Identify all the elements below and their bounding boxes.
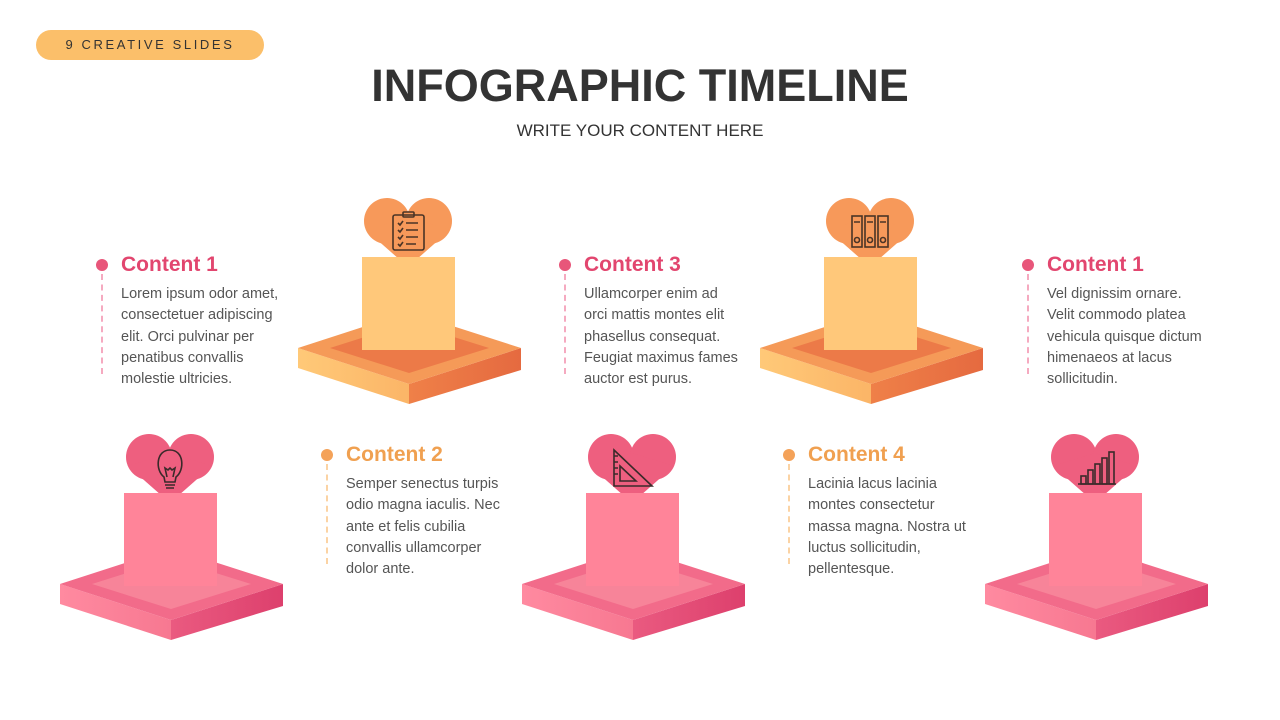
icon: clipboard: [393, 212, 424, 250]
text: content 4: pellentesque.: [808, 561, 894, 577]
badge: [36, 30, 264, 60]
text: content 1 right: Vel dignissim ornare.: [1047, 286, 1182, 302]
text: content 3: [559, 253, 738, 387]
subtitle: WRITE YOUR CONTENT HERE: [517, 121, 763, 140]
badge: 9 CREATIVE SLIDES: [66, 37, 234, 52]
text: content 1 right: Velit commodo platea: [1047, 307, 1186, 323]
text: content 3: Feugiat maximus fames: [584, 350, 738, 366]
pillar 3 (orange, binders): [760, 198, 983, 404]
text: content 1: molestie ultricies.: [121, 371, 232, 387]
text: content 1: Lorem ipsum odor amet,: [121, 286, 278, 302]
text: content 1 right: himenaeos at lacus: [1047, 350, 1172, 366]
text: content 4: luctus sollicitudin,: [808, 540, 921, 556]
text: content 2: convallis ullamcorper: [346, 540, 481, 556]
text: content 1 right: [1022, 253, 1202, 387]
icon: bar chart: [1078, 452, 1116, 484]
text: content 1: Content 1: [121, 253, 218, 276]
icon: binders: [852, 216, 888, 247]
text: content 2: [321, 443, 500, 577]
pillar 1 (orange, clipboard): [298, 198, 521, 404]
text: content 4: Content 4: [808, 443, 905, 466]
icon: set square: [614, 450, 652, 486]
text: content 2: dolor ante.: [346, 561, 415, 577]
text: content 1: consectetuer adipiscing: [121, 307, 273, 323]
title: INFOGRAPHIC TIMELINE: [371, 60, 909, 111]
text: content 3: Content 3: [584, 253, 681, 276]
text: content 4: massa magna. Nostra ut: [808, 519, 966, 535]
pillar 5 (pink, bar chart): [985, 434, 1208, 640]
text: content 2: ante et felis cubilia: [346, 519, 465, 535]
text: content 3: orci mattis montes elit: [584, 307, 724, 323]
text: content 4: [783, 443, 966, 577]
text: content 3: phasellus consequat.: [584, 329, 720, 345]
text: content 3: Ullamcorper enim ad: [584, 286, 718, 302]
text: content 2: Semper senectus turpis: [346, 476, 498, 492]
text: content 1: penatibus convallis: [121, 350, 244, 366]
text: content 3: auctor est purus.: [584, 371, 692, 387]
text: content 2: odio magna iaculis. Nec: [346, 497, 500, 513]
icon: lightbulb: [158, 450, 182, 488]
text: content 1 right: sollicitudin.: [1047, 371, 1118, 387]
pillar 2 (pink, bulb): [60, 434, 283, 640]
text: content 4: Lacinia lacus lacinia: [808, 476, 937, 492]
text: content 2: Content 2: [346, 443, 443, 466]
text: content 1: elit. Orci pulvinar per: [121, 329, 254, 345]
text: content 1 right: vehicula quisque dictum: [1047, 329, 1202, 345]
pillar 4 (pink, ruler triangle): [522, 434, 745, 640]
text: content 4: montes consectetur: [808, 497, 935, 513]
text: content 1: [96, 253, 278, 387]
text: content 1 right: Content 1: [1047, 253, 1144, 276]
